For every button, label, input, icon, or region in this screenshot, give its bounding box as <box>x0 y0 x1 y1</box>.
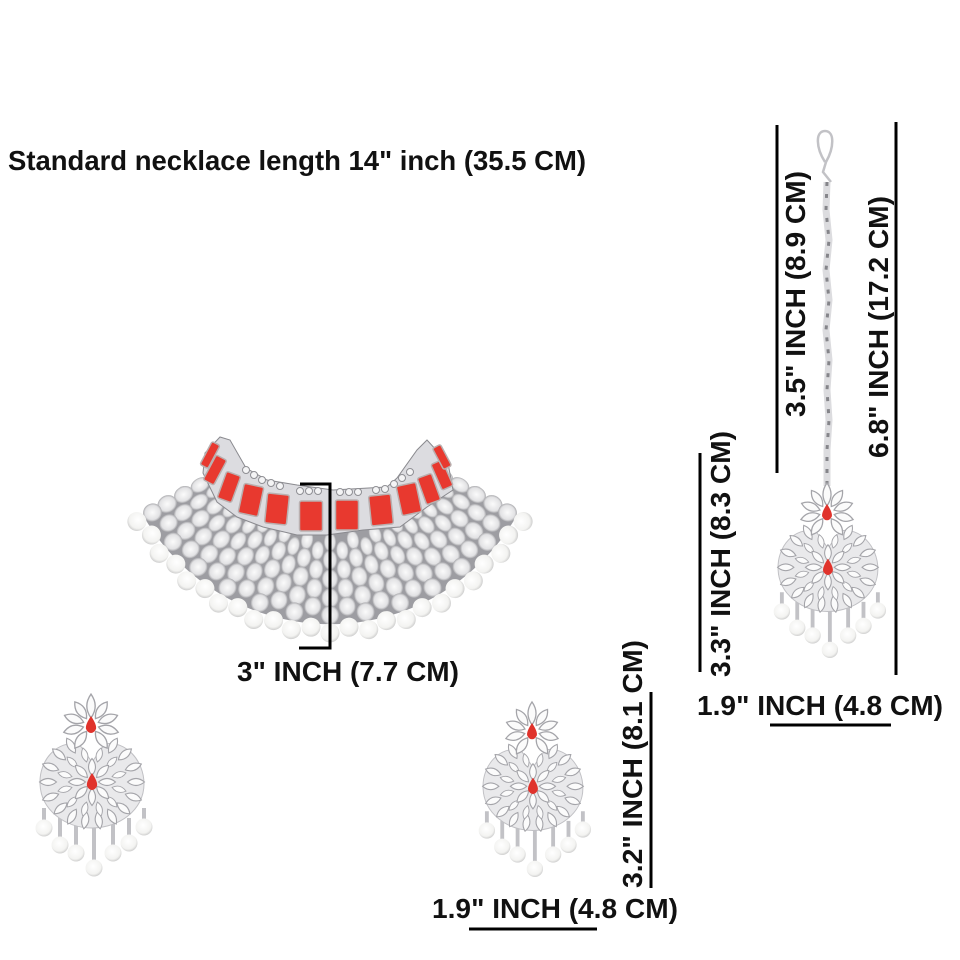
tikka hook <box>818 131 832 182</box>
label: earring width: 1.9" INCH (4.8 CM) <box>432 893 678 924</box>
necklace fan of kundan strands <box>124 463 536 642</box>
necklace silver collar band <box>203 437 453 535</box>
earring: left <box>36 694 152 876</box>
earring: right <box>479 702 591 877</box>
title: standard necklace length: Standard necklace length 14" inch (35.5 CM) <box>8 145 586 176</box>
label: necklace height: 3" INCH (7.7 CM) <box>237 656 459 687</box>
dimension line: tikka total <box>894 122 898 675</box>
label: tikka pendant height: 3.3" INCH (8.3 CM) <box>705 431 736 677</box>
label: tikka total length: 6.8" INCH (17.2 CM) <box>863 196 894 458</box>
label: earring height: 3.2" INCH (8.1 CM) <box>617 640 648 888</box>
necklace height bracket <box>299 484 330 648</box>
maang tikka <box>774 131 886 658</box>
necklace red gems <box>200 441 453 531</box>
tikka chain <box>826 182 829 486</box>
dimension line: tikka chain <box>776 125 778 473</box>
dimension line: tikka pendant height <box>698 453 702 672</box>
dimension line: earring width <box>469 928 597 930</box>
necklace collar beads <box>242 466 414 496</box>
label: tikka pendant width: 1.9" INCH (4.8 CM) <box>697 690 943 721</box>
label: tikka chain length: 3.5" INCH (8.9 CM) <box>780 171 811 417</box>
dimension line: earring height <box>650 692 652 888</box>
tikka pendant <box>774 483 886 658</box>
necklace <box>124 437 536 642</box>
dimension line: tikka pendant width <box>770 724 891 726</box>
